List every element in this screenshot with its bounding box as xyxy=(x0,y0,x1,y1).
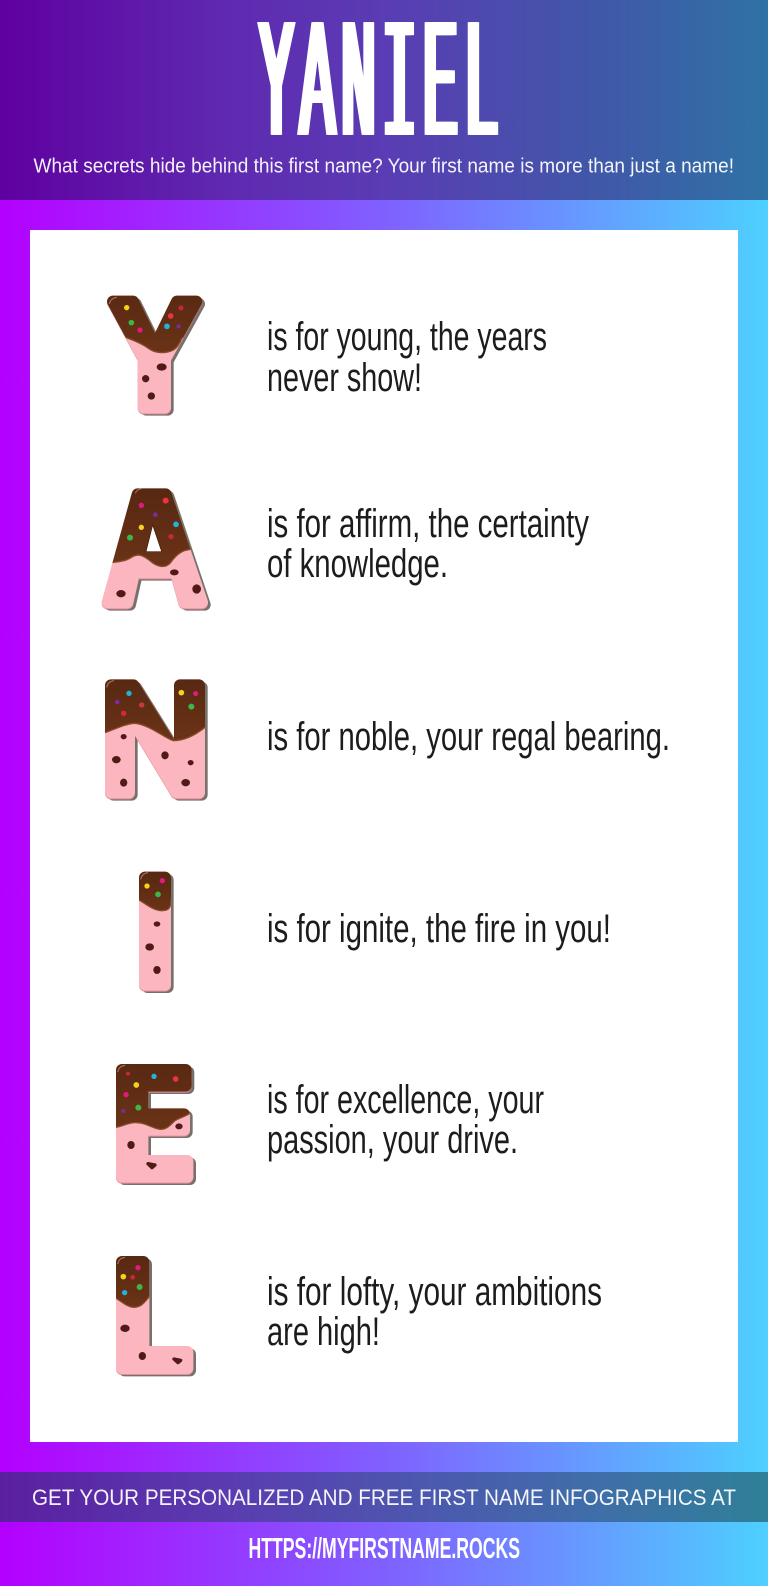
text: E line: is for excellence, your xyxy=(267,1078,544,1122)
subtitle: What secrets hide behind this first name? Your first name is more than just a name! xyxy=(34,154,734,178)
text: A line: of knowledge. xyxy=(267,542,448,586)
letter L illustration xyxy=(116,1256,196,1376)
letter A illustration xyxy=(102,488,211,611)
letter I illustration xyxy=(139,872,174,993)
footer url: HTTPS://MYFIRSTNAME.ROCKS xyxy=(248,1533,520,1565)
letter E illustration xyxy=(116,1064,196,1185)
letter N illustration xyxy=(105,679,208,801)
title: YANIEL xyxy=(259,0,505,188)
text: L line xyxy=(267,1270,602,1354)
text: A line xyxy=(267,502,589,586)
text: E line xyxy=(267,1078,544,1162)
text: Y line xyxy=(267,315,547,400)
text: E line: passion, your drive. xyxy=(267,1118,518,1162)
text: A line: is for affirm, the certainty xyxy=(267,502,589,546)
text: I line: is for ignite, the fire in you! xyxy=(267,907,611,951)
letter Y illustration xyxy=(107,296,205,416)
text: Y line: never show! xyxy=(267,356,422,400)
text: Y line: is for young, the years xyxy=(267,315,547,359)
text: L line: are high! xyxy=(267,1310,380,1354)
content panel xyxy=(30,230,738,1442)
footer call to action: GET YOUR PERSONALIZED AND FREE FIRST NAME INFOGRAPHICS AT xyxy=(32,1485,736,1510)
text: L line: is for lofty, your ambitions xyxy=(267,1270,602,1314)
footer band xyxy=(0,1472,768,1522)
header band xyxy=(0,0,768,200)
